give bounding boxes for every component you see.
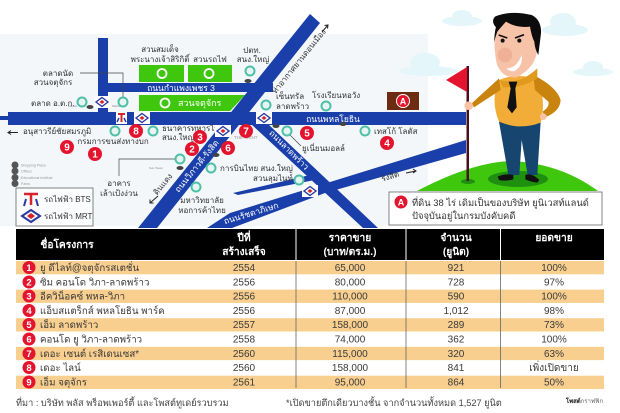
project names: เดอะ ไลน์ (40, 362, 81, 374)
map legend: transit (16, 188, 93, 226)
callout: site note: ปัจจุบันอยู่ในกรมบังคับคดี (412, 210, 515, 222)
sales: 63% (544, 349, 564, 360)
place labels: กรมการขนส่งทางบก (77, 137, 149, 146)
sales: 97% (544, 278, 564, 288)
project names: ยู ดีไลท์@จตุจักรสเตชั่น (40, 261, 139, 274)
place labels: สนง.ใหญ่ (237, 55, 269, 64)
sales: 100% (541, 263, 567, 274)
units: 841 (448, 363, 465, 374)
table: 4 (26, 306, 32, 317)
table header: สร้างเสร็จ (222, 244, 266, 258)
table: 8 (26, 363, 32, 374)
footnote: *เปิดขายตึกเดียวบางชั้น จากจำนวนทั้งหมด 1,527 ยูนิต (286, 395, 502, 409)
project names: คอนโด ยู วิภา-ลาดพร้าว (40, 334, 142, 346)
park labels: พระนางเจ้าสิริกิติ์ (131, 53, 191, 64)
table: 9 (26, 377, 32, 388)
place labels (23, 46, 418, 215)
callout: site note: ที่ดิน 38 ไร่ เดิมเป็นของบริษัท ยูนิเวสท์แลนด์ (412, 196, 589, 209)
place labels: สวนจตุจักร (34, 78, 73, 87)
completion years: 2554 (233, 263, 256, 274)
sales: เพิ่งเปิดขาย (529, 360, 579, 374)
table header: ราคาขาย (329, 233, 371, 244)
place labels: ยูเนี่ยนมอลล์ (302, 142, 345, 154)
clouds (399, 10, 613, 76)
prices: 110,000 (332, 292, 368, 302)
table: 5 (26, 320, 32, 331)
map legend: place types: Educational Institute (21, 176, 53, 180)
units: 728 (448, 278, 465, 288)
completion years: 2560 (233, 349, 256, 360)
illustration: hill (417, 161, 598, 191)
table header: (ยูนิต) (443, 246, 469, 259)
place labels: ธนาคารทหารไทย (162, 124, 224, 133)
prices (332, 263, 369, 388)
place labels: Sun Tower (149, 166, 163, 170)
table: 6 (26, 334, 32, 345)
place labels: สวนลุมไนท์ (253, 173, 293, 183)
units: 289 (448, 320, 465, 331)
row stripes (16, 261, 604, 389)
project number markers: 2 (189, 144, 195, 156)
road labels: ท่าอากาศยานดอนเมือง (270, 27, 328, 95)
project number markers: 3 (197, 132, 203, 144)
road labels: ถนนพหลโยธิน (306, 114, 360, 124)
table: 3 (26, 291, 32, 302)
road labels: ดินแดง (152, 172, 174, 197)
place labels: สนง.ใหญ่ (162, 133, 195, 142)
place labels: เซ็นทรัล (276, 91, 304, 101)
road labels: ถนนวิภาวดี-รังสิต (172, 138, 221, 194)
map legend: place types (12, 162, 53, 187)
road labels: ถนนรัชดาภิเษก (223, 200, 280, 226)
sales: 50% (544, 378, 564, 388)
project names: เอ็ม ลาดพร้าว (40, 318, 98, 331)
place labels: การบินไทย สนง.ใหญ่ (220, 164, 293, 173)
units (443, 263, 469, 388)
place labels: ลาดพร้าว (276, 102, 309, 111)
completion years: 2556 (233, 292, 256, 302)
place labels: มหาวิทยาลัย (180, 196, 224, 205)
teal location pins (78, 66, 370, 192)
sales: 73% (544, 320, 564, 331)
map legend: transit: รถไฟฟ้า BTS (44, 195, 91, 204)
illustration: man (464, 13, 561, 183)
callout: site note: A (398, 198, 405, 208)
illustration: flag (446, 66, 469, 181)
project number markers: 9 (64, 142, 70, 154)
prices: 87,000 (335, 306, 366, 317)
prices: 115,000 (332, 349, 368, 360)
project names: แอ็บสแตร็กส์ พหลโยธิน พาร์ค (40, 304, 165, 317)
project number markers: 1 (92, 150, 98, 160)
park labels: สวนสมเด็จ (141, 44, 179, 54)
prices: 65,000 (335, 263, 366, 274)
units: 921 (448, 263, 465, 274)
table: 1 (26, 263, 32, 274)
units: 590 (448, 292, 465, 302)
completion years: 2561 (233, 378, 256, 388)
sales (529, 263, 579, 388)
roads (0, 14, 466, 228)
prices: 95,000 (335, 378, 366, 388)
map legend: transit: รถไฟฟ้า MRT (44, 212, 93, 221)
project names: เดอะ เซนต์ เรสิเดนเซส* (40, 348, 139, 360)
sales: 100% (541, 292, 567, 302)
place labels: THE SAINT (234, 135, 258, 140)
project number markers: 6 (225, 144, 231, 154)
project names: อีควิน็อคซ์ พหล-วิภา (40, 290, 125, 302)
road labels: รังสิต (380, 170, 400, 184)
units: 320 (448, 349, 465, 360)
callout: site note (389, 192, 602, 225)
prices: 80,000 (335, 278, 366, 288)
place labels: ตลาดนัด (43, 69, 73, 78)
source note: ที่มา : บริษัท พลัส พร็อพเพอร์ตี้ และโพสต์ทูเดย์รวบรวม (16, 395, 229, 409)
completion years: 2558 (233, 334, 256, 346)
place labels: ตลาด อ.ต.ก. (31, 99, 75, 108)
completion years: 2556 (233, 278, 256, 288)
project names: เอ็ม จตุจักร (40, 376, 87, 388)
project number markers: 5 (304, 128, 310, 140)
credit: โพสต์กราฟฟิก (565, 397, 603, 405)
direction arrows (8, 25, 416, 203)
project number markers: 4 (384, 138, 390, 150)
units: 1,012 (443, 306, 469, 317)
project number markers: 7 (243, 126, 249, 138)
completion years: 2557 (233, 320, 256, 331)
place labels: Market (68, 104, 77, 108)
prices: 74,000 (335, 334, 366, 346)
sales: 98% (544, 306, 564, 317)
park labels: สวนรถไฟ (193, 55, 227, 64)
completion years: 2560 (233, 363, 256, 374)
project number markers: 8 (133, 126, 139, 138)
park labels (131, 44, 227, 109)
place labels: อาคาร (107, 179, 131, 188)
table header: จำนวน (440, 232, 472, 244)
place labels: หอการค้าไทย (178, 206, 226, 215)
table: 2 (26, 277, 32, 288)
map legend: place types: Parks (21, 182, 30, 186)
place labels: อนุสาวรีย์ชัยสมรภูมิ (23, 126, 91, 137)
site marker A: A (400, 96, 407, 106)
green park blocks (139, 65, 245, 111)
units: 864 (448, 378, 465, 388)
place labels: โรงเรียนหอวัง (312, 90, 360, 100)
project number markers (60, 124, 394, 161)
map background (0, 34, 428, 226)
table (16, 229, 604, 389)
road labels (147, 27, 400, 226)
map legend: place types: Shopping Plaza (21, 164, 46, 168)
place labels: Market (112, 104, 121, 108)
park labels: สวนจตุจักร (178, 98, 222, 109)
table header: (บาท/ตร.ม.) (324, 247, 376, 258)
road labels: ถนนลาดพร้าว (267, 128, 311, 172)
site marker A (387, 92, 419, 110)
project names (40, 261, 165, 388)
table header: ยอดขาย (535, 233, 573, 244)
place labels: เทสโก้ โลตัส (374, 126, 418, 136)
units: 362 (448, 334, 465, 346)
table header: ชื่อโครงการ (40, 237, 94, 251)
completion years (233, 263, 256, 388)
sales: 100% (541, 334, 567, 346)
place labels: ปตท. (243, 46, 261, 55)
prices: 158,000 (332, 363, 369, 374)
completion years: 2556 (233, 306, 256, 317)
table header (16, 229, 604, 260)
project names: ซิม คอนโด วิภา-ลาดพร้าว (40, 276, 149, 288)
row number badges (22, 261, 36, 388)
table: 7 (26, 349, 32, 360)
road labels: ถนนกำแพงเพชร 3 (147, 83, 215, 93)
prices: 158,000 (332, 320, 369, 331)
map legend: place types: Offices (21, 170, 32, 174)
place labels: เล้าเป้งง่วน (100, 189, 138, 198)
transit stations (94, 96, 318, 197)
table header: ปีที่ (237, 230, 251, 244)
